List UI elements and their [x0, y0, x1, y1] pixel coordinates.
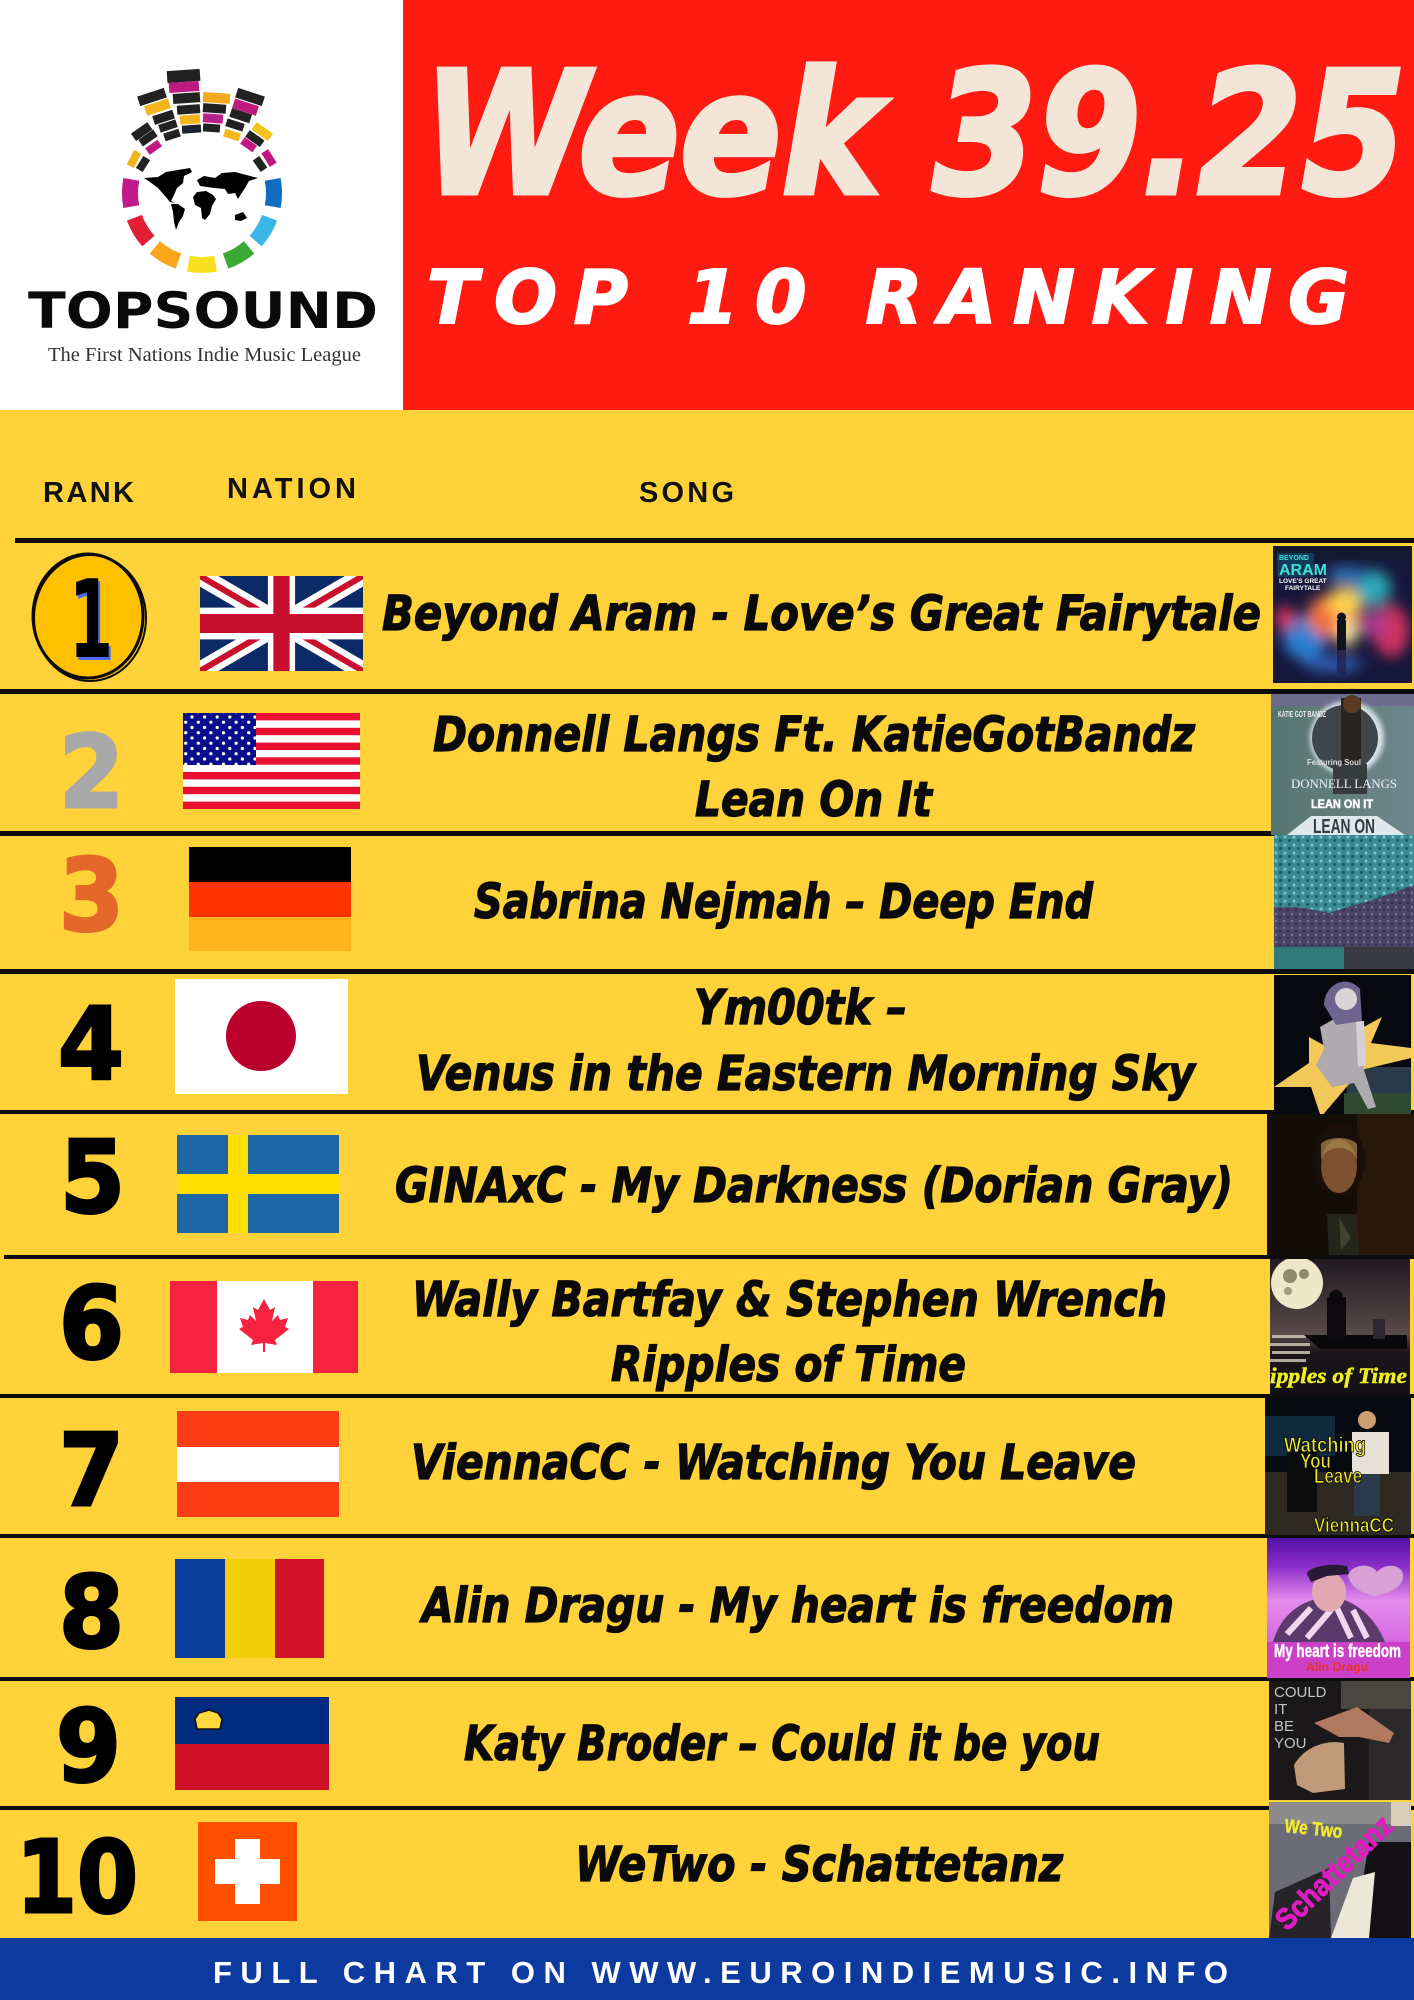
row 3: [59, 835, 1414, 969]
album cover: [1267, 1538, 1410, 1678]
album cover: [1274, 835, 1414, 969]
panel: logo: [0, 0, 403, 410]
rank 3: 3: [59, 837, 124, 954]
flag: Austria: [177, 1411, 339, 1517]
album cover: FAIRYTALE: [1285, 585, 1321, 592]
album cover: [1270, 1257, 1410, 1396]
song title: Alin Dragu - My heart is freedom: [419, 1578, 1174, 1634]
column heading: rank: RANK: [43, 477, 134, 509]
footer text: FULL CHART ON WWW.EUROINDIEMUSIC.INFO: [213, 1955, 1228, 1990]
song title line 2: Venus in the Eastern Morning Sky: [416, 1046, 1196, 1102]
logo: world map: [144, 168, 258, 230]
album cover: [1265, 1398, 1411, 1537]
album cover: BEYOND: [1279, 555, 1309, 562]
song title line 1: Wally Bartfay & Stephen Wrench: [412, 1272, 1167, 1328]
flag: Sweden: [177, 1135, 339, 1233]
album cover: [1271, 694, 1414, 838]
song title line 2: Ripples of Time: [611, 1337, 966, 1393]
logo: equalizer arcs: [127, 69, 277, 172]
rank badge 1: 1: [69, 558, 113, 683]
rank badge 1: 1: [71, 561, 115, 686]
row 8: [59, 1538, 1410, 1678]
album cover: [1269, 1681, 1411, 1800]
album cover: YOU: [1274, 1735, 1307, 1752]
album cover: Leave: [1314, 1465, 1362, 1488]
rank 2: 2: [59, 714, 124, 831]
song title: ViennaCC - Watching You Leave: [411, 1435, 1136, 1491]
row 9: [56, 1681, 1411, 1805]
song title: Katy Broder – Could it be you: [464, 1716, 1100, 1772]
column heading: nation: NATION: [227, 473, 356, 505]
column heading: song: SONG: [639, 477, 734, 509]
row dividers: [0, 538, 1414, 1810]
logo: colour ring: [122, 178, 282, 273]
flag: United Kingdom: [200, 576, 363, 671]
album cover: LEAN ON IT: [1311, 797, 1374, 811]
album cover: [1274, 975, 1411, 1117]
subtitle: TOP 10 RANKING: [427, 255, 1349, 341]
logo wordmark: TOPSOUND: [28, 282, 378, 340]
flag: Germany: [189, 847, 351, 951]
rank 8: 8: [59, 1554, 124, 1671]
song title: Sabrina Nejmah – Deep End: [474, 874, 1094, 930]
album cover: IT: [1274, 1701, 1287, 1718]
album cover: [1273, 546, 1412, 683]
rank 10: 10: [16, 1819, 138, 1936]
song title: GINAxC - My Darkness (Dorian Gray): [395, 1158, 1233, 1214]
rank 4: 4: [58, 986, 124, 1103]
flag: Japan: [175, 979, 348, 1094]
rank 7: 7: [59, 1412, 124, 1529]
footer bar: [0, 1938, 1414, 2000]
album cover: We Two: [1283, 1816, 1343, 1843]
song title line 1: Donnell Langs Ft. KatieGotBandz: [433, 707, 1196, 763]
row 5: [60, 1114, 1414, 1255]
album cover: Watching: [1284, 1434, 1366, 1457]
album cover: ViennaCC: [1314, 1515, 1394, 1537]
song title: WeTwo - Schattetanz: [575, 1837, 1064, 1893]
rank 9: 9: [56, 1688, 121, 1805]
flag: Liechtenstein: [175, 1697, 329, 1790]
album cover: Alin Dragu: [1306, 1660, 1368, 1674]
row 1: [33, 546, 1412, 686]
album cover: You: [1300, 1450, 1331, 1473]
album cover: ipples of Time: [1270, 1363, 1407, 1388]
row 4: [58, 975, 1411, 1117]
row 10: [16, 1802, 1411, 1938]
song title line 1: Ym00tk –: [694, 980, 907, 1036]
album cover: ARAM: [1279, 562, 1327, 579]
flag: Canada: [170, 1281, 358, 1373]
panel: title banner: [403, 0, 1414, 410]
song title: Beyond Aram - Love’s Great Fairytale: [382, 586, 1261, 642]
rank 5: 5: [60, 1119, 125, 1236]
logo tagline: The First Nations Indie Music League: [48, 344, 361, 366]
row 7: [59, 1398, 1411, 1537]
album cover: LOVE'S GREAT: [1279, 578, 1327, 585]
album cover: BE: [1274, 1718, 1294, 1735]
album cover: KATIE GOT BANDZ: [1278, 709, 1326, 719]
album cover: DONNELL LANGS: [1291, 776, 1397, 791]
album cover: Featuring Soul: [1307, 758, 1361, 767]
rank 6: 6: [59, 1265, 124, 1382]
flag: Switzerland: [198, 1822, 297, 1921]
rank badge 1: [33, 554, 146, 686]
album cover: [1267, 1114, 1414, 1255]
row 2: [59, 694, 1414, 838]
row 6: [59, 1257, 1410, 1396]
album cover: COULD: [1274, 1684, 1327, 1701]
flag: United States: [183, 713, 360, 809]
song title line 2: Lean On It: [695, 772, 934, 828]
album cover: LEAN ON: [1313, 816, 1375, 838]
flag: Romania: [175, 1559, 324, 1658]
